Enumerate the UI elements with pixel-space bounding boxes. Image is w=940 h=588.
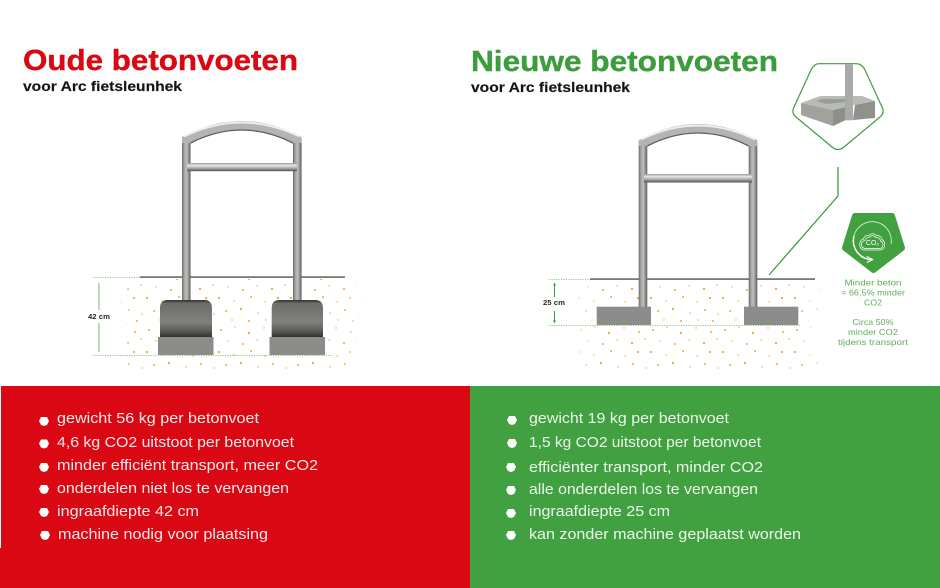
left concrete foot <box>158 300 214 355</box>
heading: old concrete feet: Oude betonvoeten <box>23 45 298 77</box>
concrete block <box>801 96 875 126</box>
soil texture <box>572 281 824 369</box>
text block: CO2 savings: minder CO2 <box>848 327 898 337</box>
list items: ingraafdiepte 25 cm <box>529 504 670 520</box>
connector line from callout to foot <box>769 167 838 275</box>
right concrete foot <box>744 307 798 325</box>
list items <box>529 411 801 543</box>
list items: alle onderdelen los te vervangen <box>529 482 758 498</box>
list items: kan zonder machine geplaatst worden <box>529 527 801 543</box>
depth guide: 42 cm: 42 cm <box>88 312 110 321</box>
illustration: new rack with shallow concrete feet <box>543 124 824 369</box>
bullet icons <box>506 416 517 540</box>
icon: CO2 reduction badge: CO₂ <box>866 240 879 247</box>
panel: drawbacks of old feet <box>0 386 470 588</box>
heading: new concrete feet: Nieuwe betonvoeten <box>471 46 778 78</box>
heading: new concrete feet <box>471 46 778 95</box>
list items: gewicht 19 kg per betonvoet <box>529 411 729 427</box>
illustration: old rack with deep concrete feet <box>88 121 366 371</box>
rack frame <box>639 124 757 307</box>
text block: CO2 savings: = 66,5% minder <box>841 288 905 298</box>
list items: 4,6 kg CO2 uitstoot per betonvoet <box>57 435 294 451</box>
panel: benefits of new feet <box>470 386 940 588</box>
list items: gewicht 56 kg per betonvoet <box>57 411 259 427</box>
ground line <box>140 276 345 278</box>
callout: close-up of the new concrete foot <box>793 64 883 150</box>
heading: new concrete feet: voor Arc fietsleunhek <box>471 79 630 95</box>
ground line <box>590 278 815 280</box>
badge background <box>845 216 902 270</box>
heading: old concrete feet: voor Arc fietsleunhek <box>23 78 182 94</box>
depth guide: 42 cm <box>88 278 332 356</box>
red background <box>0 386 470 588</box>
list items: ingraafdiepte 42 cm <box>57 504 199 520</box>
list items: onderdelen niet los te vervangen <box>57 481 289 497</box>
soil texture <box>112 279 366 371</box>
text block: CO2 savings: Circa 50% <box>852 317 894 327</box>
green background <box>470 386 940 588</box>
list items <box>57 411 318 543</box>
text block: CO2 savings: Minder beton <box>844 278 902 288</box>
list items: efficiënter transport, minder CO2 <box>529 460 763 476</box>
left concrete foot <box>597 307 651 325</box>
list items: 1,5 kg CO2 uitstoot per betonvoet <box>529 435 761 451</box>
steel post <box>845 64 853 120</box>
circular arrow <box>853 222 891 262</box>
text block: CO2 savings: tijdens transport <box>838 337 909 347</box>
list items: machine nodig voor plaatsing <box>58 527 268 543</box>
pentagon frame <box>793 64 883 150</box>
text block: CO2 savings <box>838 278 909 347</box>
depth guide: 25 cm: 25 cm <box>543 298 565 307</box>
depth guide: 25 cm <box>543 280 800 326</box>
bullet icons <box>39 417 50 540</box>
cloud outline <box>860 234 885 250</box>
text block: CO2 savings: CO2 <box>864 298 882 308</box>
icon: CO2 reduction badge <box>845 216 902 270</box>
heading: old concrete feet <box>23 45 298 94</box>
rack frame <box>182 121 302 301</box>
list items: minder efficiënt transport, meer CO2 <box>57 458 318 474</box>
right concrete foot <box>270 300 325 355</box>
